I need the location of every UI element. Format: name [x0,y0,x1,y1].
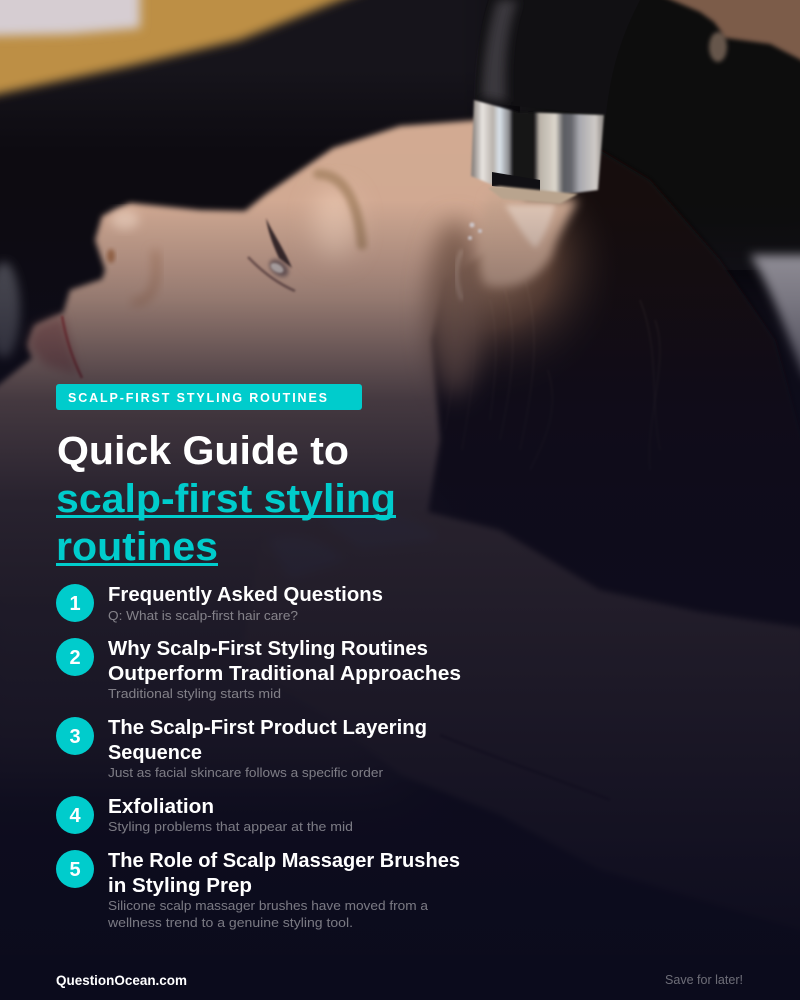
faucet: black hose [475,0,640,115]
photo: golden shelf band [0,0,390,98]
photo: hair mass [340,130,800,640]
list item 3: Just as facial skincare follows a specific order [108,765,384,780]
photo: grey blurred object on right [750,255,800,378]
category tag: SCALP-FIRST STYLING ROUTINES [68,391,327,405]
photo: water stream [457,195,578,300]
photo: hand at top-right [660,0,800,62]
list item 2: Outperform Traditional Approaches [108,663,461,685]
list item 3: The Scalp-First Product Layering [108,717,427,739]
faucet: spout slot [492,172,540,192]
list item 4: 4 [69,805,81,827]
list item 5: The Role of Scalp Massager Brushes [108,850,460,872]
list item 3 [56,717,427,780]
footer: site name: QuestionOcean.com [56,972,187,988]
list item 1: Q: What is scalp-first hair care? [108,608,298,623]
list item 5: in Styling Prep [108,875,252,897]
list item 5: 5 [69,859,81,881]
list item 1: Frequently Asked Questions [108,584,383,606]
list item 2: Why Scalp-First Styling Routines [108,638,428,660]
photo: blurred object on left edge [0,262,20,358]
category tag [56,384,362,410]
photo: faucet [471,0,640,204]
list item 1 [56,584,383,623]
list item 4 [56,796,353,834]
footer: save note: Save for later! [665,972,743,987]
faucet: bottom ring [488,186,578,204]
list item 4: Exfoliation [108,796,214,818]
list item 5 [56,850,460,930]
list item 4: Styling problems that appear at the mid [108,819,353,834]
list item 3: 3 [69,726,81,748]
title: Quick Guide to [57,429,349,473]
face: lips [28,315,82,378]
photo: black upper-right backdrop [520,0,800,270]
face: eye [248,218,295,291]
face: blend toward hairline [427,220,483,400]
photo: blurred white object top-left [0,0,140,36]
title: scalp-first styling [56,477,396,521]
list item 5: Silicone scalp massager brushes have moved from a [108,898,429,913]
photo: soft lower-left body glow [0,520,410,790]
list item 2: Traditional styling starts mid [108,686,281,701]
photo: hands at bottom [240,510,800,932]
list item 1: 1 [69,593,81,615]
footer bar [0,955,800,1000]
face: nose tip highlight [111,210,139,230]
list item 5: wellness trend to a genuine styling tool. [107,915,353,930]
face: eyebrow [318,174,362,245]
list item 3: Sequence [108,742,202,764]
photo: face in profile [0,120,530,600]
title [56,429,396,569]
face: nostril and nose wing [107,249,156,302]
title: routines [56,525,218,569]
list item 2 [56,638,461,701]
list item 2: 2 [69,647,81,669]
faucet: chrome collar [471,100,604,195]
face: eyelid highlight [313,190,357,260]
